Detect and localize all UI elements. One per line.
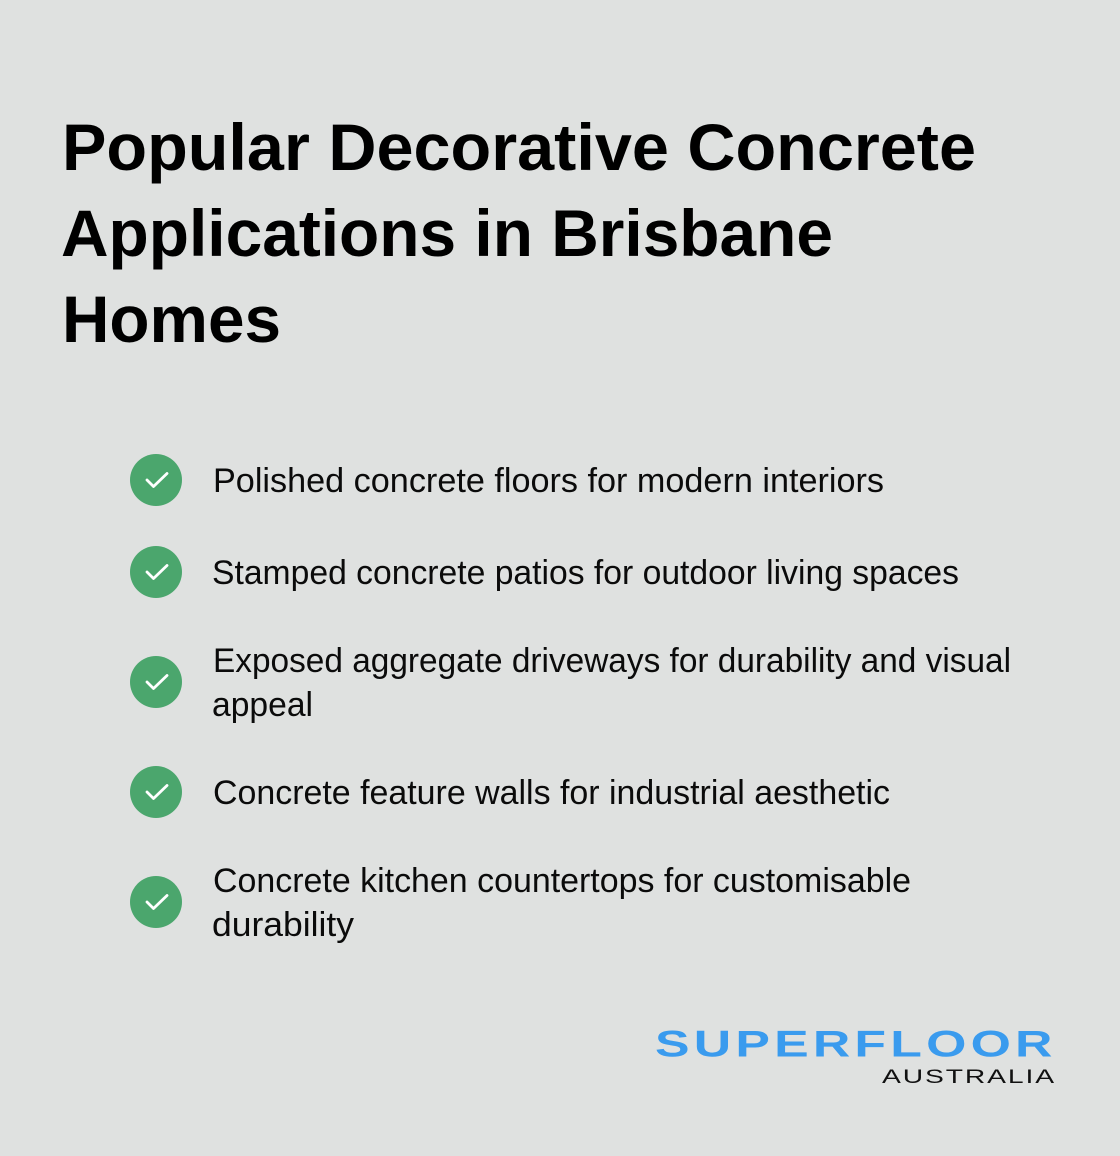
item: polished concrete floors: Polished concrete floors for modern interiors (213, 462, 884, 500)
item: concrete feature walls (130, 766, 890, 818)
item: concrete kitchen countertops: durability (212, 906, 354, 944)
item: stamped concrete patios: Stamped concrete patios for outdoor living spaces (212, 554, 959, 592)
title: Homes (62, 282, 281, 356)
item: exposed aggregate driveways: Exposed aggregate driveways for durability and visual (213, 642, 1011, 680)
item: concrete kitchen countertops: Concrete kitchen countertops for customisable (213, 862, 911, 900)
item: exposed aggregate driveways (130, 642, 1011, 724)
item: exposed aggregate driveways: appeal (212, 686, 313, 724)
item: stamped concrete patios (130, 546, 959, 598)
item: concrete feature walls: Concrete feature walls for industrial aesthetic (213, 774, 890, 812)
checklist (130, 454, 1011, 944)
item: concrete kitchen countertops (130, 862, 911, 944)
logo: Superfloor Australia: SUPERFLOOR (655, 1023, 1057, 1065)
title: Applications in Brisbane (61, 196, 833, 270)
logo: Superfloor Australia: AUSTRALIA (882, 1066, 1056, 1088)
item: polished concrete floors (130, 454, 884, 506)
title (61, 110, 976, 356)
logo: Superfloor Australia (655, 1023, 1057, 1088)
title: Popular Decorative Concrete (62, 110, 976, 184)
